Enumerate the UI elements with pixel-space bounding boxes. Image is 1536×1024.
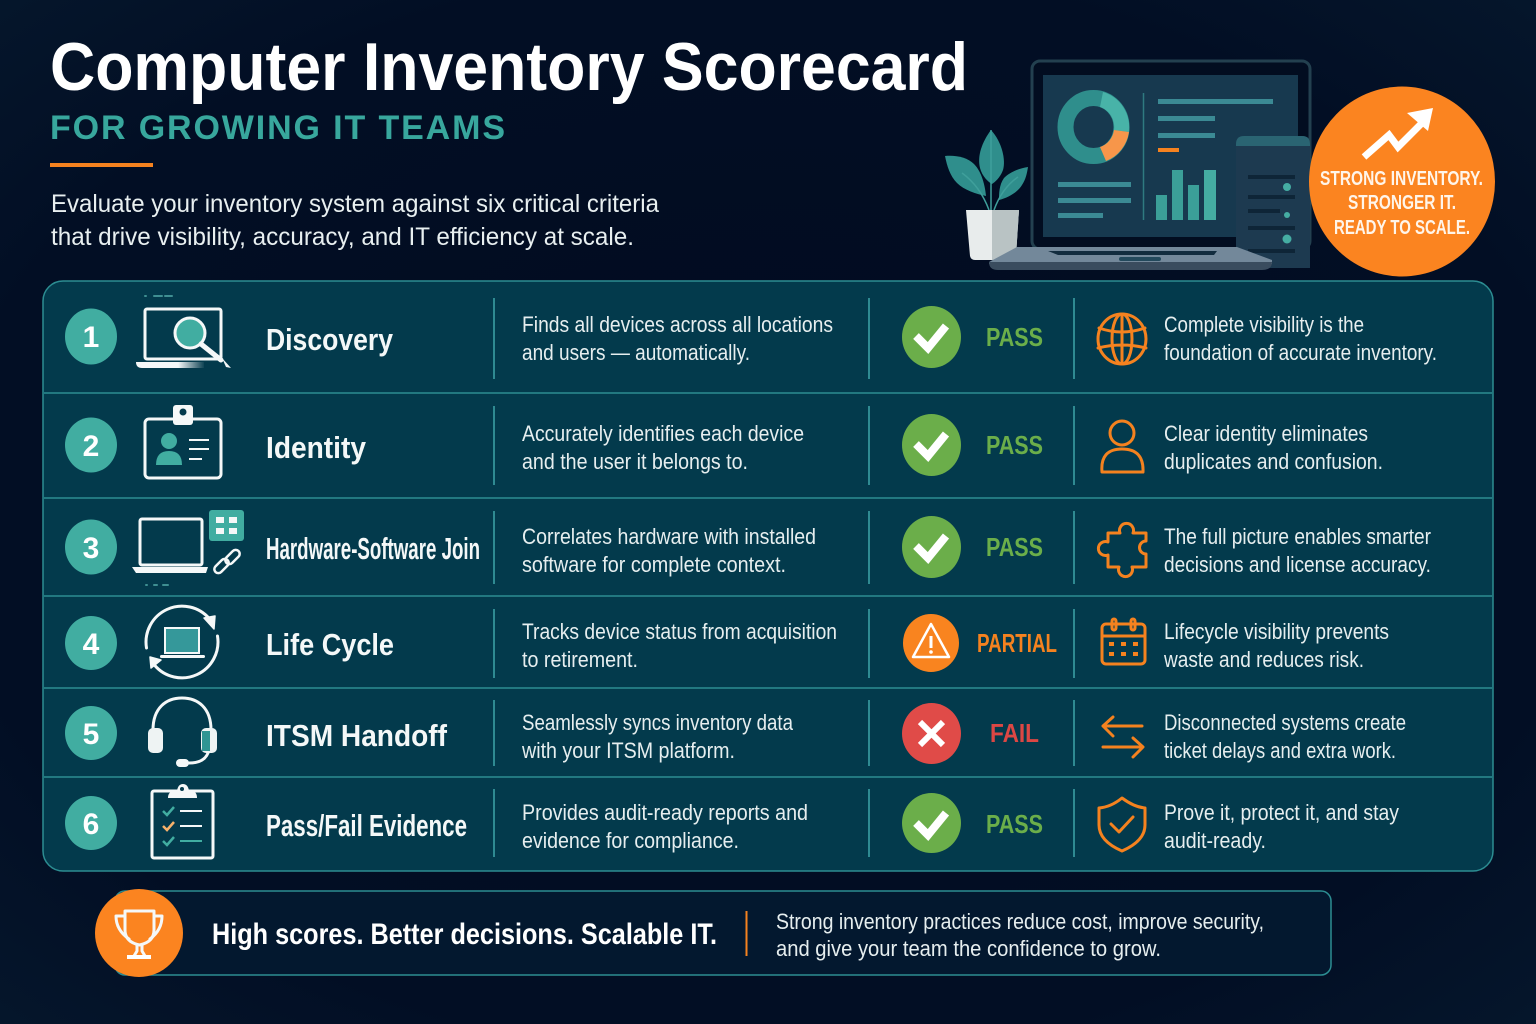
- row 3: Hardware-Software Join: [65, 510, 1431, 585]
- description: Accurately identifies each device: [522, 421, 804, 446]
- icon: exchange arrows: [1103, 717, 1143, 757]
- number 3: 3: [83, 532, 99, 565]
- icon: laptop with apps and link: [132, 510, 244, 585]
- description: [522, 312, 833, 365]
- icon: puzzle piece: [1098, 523, 1146, 577]
- why it matters: Disconnected systems create: [1164, 710, 1406, 735]
- description: Correlates hardware with installed: [522, 524, 816, 549]
- description: [522, 800, 808, 853]
- status: pass: PASS: [986, 809, 1043, 839]
- row 5: ITSM Handoff: [65, 698, 1406, 767]
- icon: calendar: [1102, 619, 1145, 664]
- status: partial: PARTIAL: [977, 628, 1057, 658]
- criterion name: Discovery: [266, 322, 394, 357]
- why it matters: duplicates and confusion.: [1164, 449, 1383, 474]
- banner text: [776, 909, 1264, 961]
- callout badge: [1309, 86, 1495, 276]
- number 2: 2: [83, 430, 99, 463]
- number 1: 1: [83, 321, 99, 354]
- why it matters: [1164, 312, 1437, 365]
- number 2: [65, 418, 117, 472]
- callout badge: STRONG INVENTORY.: [1320, 168, 1483, 190]
- row 4: Life Cycle: [65, 606, 1389, 678]
- description: [522, 421, 804, 474]
- description: evidence for compliance.: [522, 828, 739, 853]
- icon: growth arrow: [1364, 108, 1433, 157]
- why it matters: The full picture enables smarter: [1164, 524, 1431, 549]
- status: fail: [902, 703, 1039, 764]
- illustration: laptop dashboard: [1032, 61, 1310, 249]
- why it matters: decisions and license accuracy.: [1164, 552, 1431, 577]
- number 5: 5: [83, 718, 99, 751]
- panel: scorecard table: [43, 281, 1493, 871]
- description: and the user it belongs to.: [522, 449, 748, 474]
- banner headline: High scores. Better decisions. Scalable IT.: [212, 918, 717, 951]
- illustration: plant: [945, 130, 1028, 260]
- why it matters: audit-ready.: [1164, 828, 1266, 853]
- description: Tracks device status from acquisition: [522, 619, 837, 644]
- description: Seamlessly syncs inventory data: [522, 710, 794, 735]
- icon: laptop with magnifier: [136, 296, 231, 368]
- callout badge: READY TO SCALE.: [1334, 217, 1470, 239]
- description: software for complete context.: [522, 552, 786, 577]
- intro text: [51, 190, 659, 251]
- description: Finds all devices across all locations: [522, 312, 833, 337]
- number 1: [65, 308, 117, 364]
- subtitle: FOR GROWING IT TEAMS: [50, 109, 505, 147]
- banner text: and give your team the confidence to grow.: [776, 936, 1161, 961]
- why it matters: foundation of accurate inventory.: [1164, 340, 1437, 365]
- status: partial: [903, 614, 1057, 672]
- illustration: server tower: [1236, 136, 1310, 268]
- status: pass: [902, 306, 1043, 368]
- accent rule: [50, 163, 153, 167]
- why it matters: Prove it, protect it, and stay: [1164, 800, 1399, 825]
- icon: globe: [1098, 314, 1146, 364]
- why it matters: Lifecycle visibility prevents: [1164, 619, 1389, 644]
- number 4: [65, 616, 117, 670]
- description: [522, 524, 816, 577]
- description: to retirement.: [522, 647, 638, 672]
- icon: trophy badge: [95, 889, 183, 977]
- number 6: 6: [83, 808, 99, 841]
- icon: clipboard checklist: [152, 784, 213, 858]
- number 5: [65, 706, 117, 760]
- status: pass: [902, 516, 1043, 578]
- banner text: Strong inventory practices reduce cost, improve security,: [776, 909, 1264, 934]
- icon: person: [1102, 421, 1143, 472]
- dashboard lines: [1058, 99, 1273, 218]
- description: with your ITSM platform.: [521, 738, 735, 763]
- row 6: Pass/Fail Evidence: [65, 784, 1399, 858]
- criterion name: Life Cycle: [266, 627, 394, 662]
- criterion name: Hardware-Software Join: [266, 531, 480, 566]
- criterion name: ITSM Handoff: [266, 718, 448, 753]
- criterion name: Pass/Fail Evidence: [266, 808, 467, 843]
- status: fail: FAIL: [990, 718, 1039, 748]
- title: Computer Inventory Scorecard: [50, 29, 968, 105]
- icon: laptop in refresh cycle: [146, 606, 218, 678]
- why it matters: ticket delays and extra work.: [1164, 738, 1396, 763]
- why it matters: [1164, 710, 1406, 763]
- why it matters: [1164, 800, 1399, 853]
- description: [521, 710, 794, 763]
- criterion name: Identity: [266, 430, 367, 465]
- footer banner: [95, 889, 1331, 977]
- description: [522, 619, 837, 672]
- why it matters: [1163, 619, 1389, 672]
- icon: headset: [148, 698, 217, 767]
- donut chart: [1066, 92, 1129, 161]
- why it matters: [1164, 524, 1431, 577]
- number 4: 4: [83, 628, 100, 661]
- description: and users — automatically.: [522, 340, 750, 365]
- icon: shield check: [1099, 798, 1145, 851]
- number 6: [65, 796, 117, 850]
- status: pass: PASS: [986, 430, 1043, 460]
- row 2: Identity: [65, 405, 1383, 478]
- status: pass: [902, 793, 1043, 853]
- status: pass: PASS: [986, 532, 1043, 562]
- intro text: that drive visibility, accuracy, and IT efficiency at scale.: [51, 223, 634, 251]
- why it matters: [1164, 421, 1383, 474]
- icon: ID badge: [145, 405, 221, 478]
- status: pass: PASS: [986, 322, 1043, 352]
- intro text: Evaluate your inventory system against six critical criteria: [51, 190, 659, 218]
- dashboard bars: [1156, 170, 1216, 220]
- callout badge: STRONGER IT.: [1348, 192, 1456, 214]
- why it matters: Clear identity eliminates: [1164, 421, 1368, 446]
- status: pass: [902, 414, 1043, 476]
- why it matters: waste and reduces risk.: [1163, 647, 1364, 672]
- number 3: [65, 520, 117, 574]
- row 1: Discovery: [65, 296, 1437, 368]
- description: Provides audit-ready reports and: [522, 800, 808, 825]
- illustration: laptop base: [989, 247, 1272, 270]
- why it matters: Complete visibility is the: [1164, 312, 1364, 337]
